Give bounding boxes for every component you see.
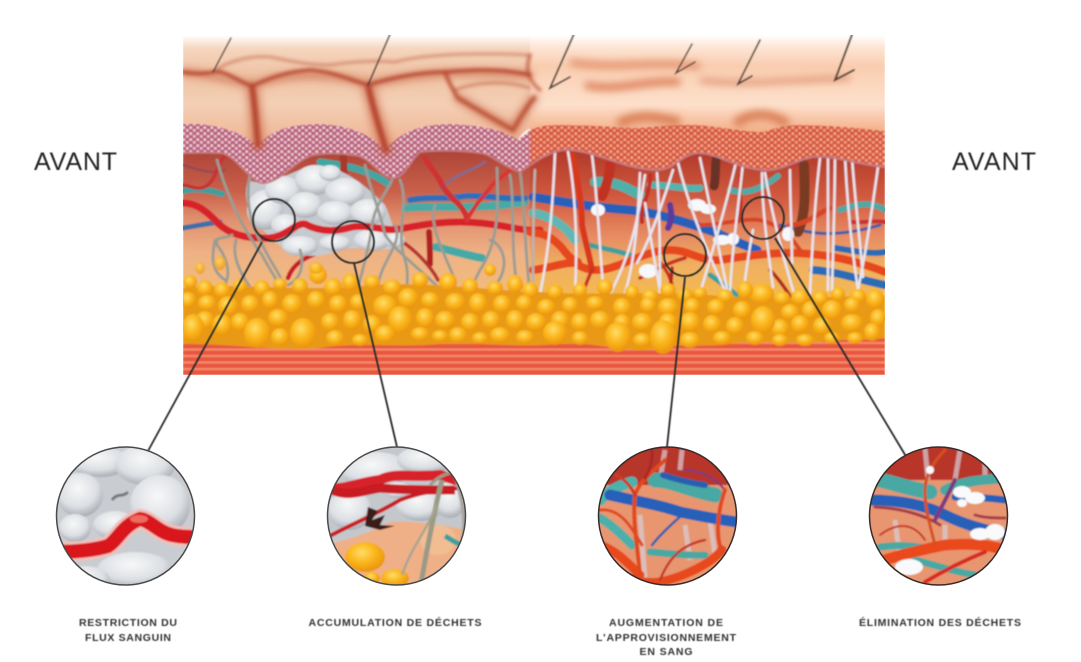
leader line 3	[667, 277, 685, 447]
leader line 4	[775, 238, 907, 458]
dermis background	[183, 145, 885, 300]
white waste deposits, right	[591, 199, 794, 278]
wide skin crease shadows, left	[183, 72, 534, 150]
inset border 3	[598, 447, 736, 585]
fat layer backing	[183, 284, 885, 350]
inset: augmentation de l'approvisionnement en sang	[596, 445, 740, 589]
soft creases, right	[570, 62, 850, 124]
caption: augmentation de l'approvisionnement en sang	[596, 617, 737, 658]
caption: restriction du flux sanguin	[79, 617, 177, 644]
cell layer, pink (left)	[183, 124, 530, 183]
artery across clump	[262, 224, 400, 238]
caption: augmentation de l'approvisionnement en sang: AUGMENTATION DE	[609, 617, 723, 629]
band outline	[183, 150, 885, 183]
caption: augmentation de l'approvisionnement en sang: EN SANG	[640, 646, 692, 658]
teal and blue veins, left	[183, 162, 525, 258]
red-orange arteries, right	[530, 155, 885, 305]
marker: elimination	[742, 197, 784, 239]
caption: restriction du flux sanguin: FLUX SANGUIN	[85, 632, 171, 644]
caption: restriction du flux sanguin: RESTRICTION DU	[79, 617, 177, 629]
yellow fat cells	[180, 256, 886, 354]
skin surface, right	[530, 35, 885, 132]
marker: augmentation	[664, 234, 706, 276]
leader lines and magnifier markers	[148, 197, 907, 458]
label: AVANT right: AVANT	[952, 148, 1036, 176]
inset border 4	[870, 447, 1008, 585]
label: AVANT left: AVANT	[34, 148, 117, 176]
skin surface, left	[183, 35, 532, 150]
inset: elimination des dechets	[867, 445, 1011, 589]
marker: restriction	[253, 199, 295, 241]
cell layer, salmon (right)	[530, 125, 885, 170]
red arteries, left	[183, 155, 540, 280]
grey-white fat clump	[246, 165, 405, 256]
muscle layer	[183, 335, 885, 375]
caption: accumulation de dechets: ACCUMULATION DE DÉCHETS	[308, 616, 482, 629]
white connective fibres, right	[533, 152, 878, 307]
inset border 1	[56, 447, 194, 585]
leader line 2	[354, 263, 397, 447]
inset: restriction du flux sanguin	[57, 448, 194, 584]
teal and blue veins, right	[533, 176, 885, 300]
caption: augmentation de l'approvisionnement en sang: L'APPROVISIONNEMENT	[596, 632, 737, 644]
skin cross-section illustration	[180, 32, 886, 375]
marker: accumulation	[332, 221, 374, 263]
brown fibres, right	[714, 160, 805, 232]
caption: elimination des dechets: ÉLIMINATION DES DÉCHETS	[859, 616, 1021, 629]
skin creases, left	[183, 54, 540, 150]
leader line 1	[148, 242, 262, 451]
hair follicles	[213, 32, 854, 88]
inset border 2	[328, 447, 466, 585]
grey fibres, left	[213, 160, 530, 295]
inset: accumulation de dechets	[328, 448, 465, 584]
